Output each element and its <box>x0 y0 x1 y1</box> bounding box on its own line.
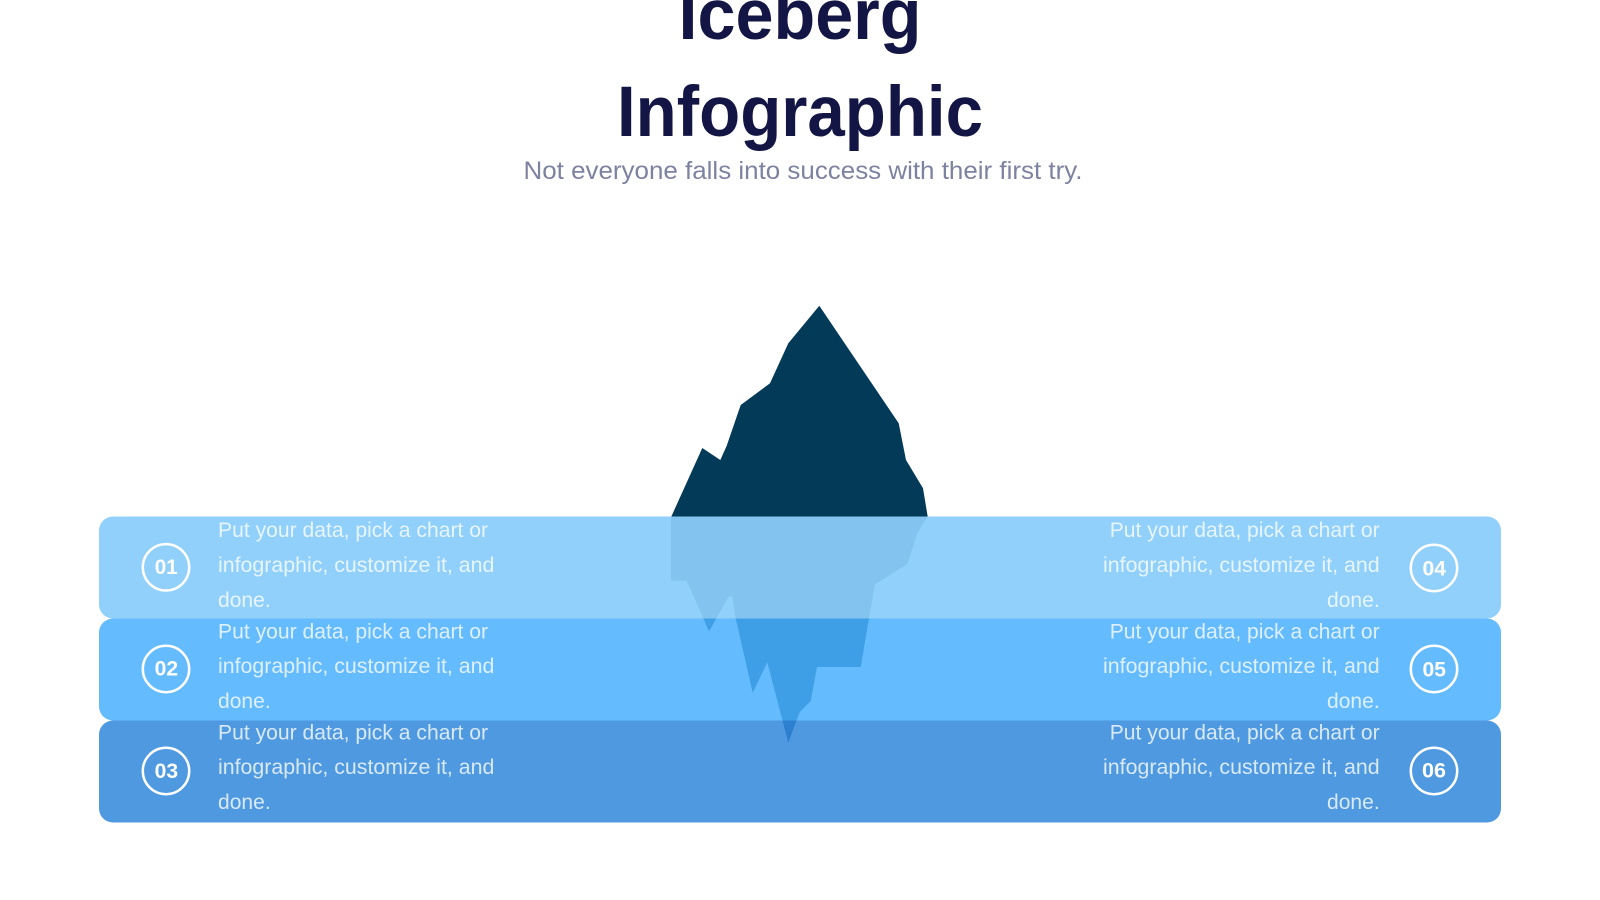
text block 06 <box>1103 721 1380 814</box>
text block 04: Put your data, pick a chart or <box>1110 519 1380 542</box>
text block 06: infographic, customize it, and <box>1103 756 1380 779</box>
subtitle: Not everyone falls into success with their first try. <box>524 157 1082 185</box>
text block 05: Put your data, pick a chart or <box>1110 620 1380 643</box>
badge 03: 03 <box>155 760 178 783</box>
text block 01 <box>218 519 494 612</box>
badge 02 <box>143 646 189 692</box>
badge 05 <box>1411 646 1457 692</box>
text block 05: done. <box>1327 690 1380 713</box>
text block 03 <box>218 721 494 814</box>
iceberg above water <box>671 306 928 517</box>
badge 04: 04 <box>1422 558 1446 580</box>
text block 04: infographic, customize it, and <box>1103 554 1380 577</box>
badge 06 <box>1411 748 1457 794</box>
text block 06: Put your data, pick a chart or <box>1110 721 1380 744</box>
badge 04 <box>1411 545 1457 591</box>
text block 02: infographic, customize it, and <box>218 655 494 678</box>
badge 06: 06 <box>1422 760 1446 782</box>
title <box>617 0 983 152</box>
text block 03: infographic, customize it, and <box>218 756 494 779</box>
text block 01: Put your data, pick a chart or <box>218 519 488 542</box>
text block 01: infographic, customize it, and <box>218 554 494 577</box>
text block 04 <box>1103 519 1380 612</box>
text block 04: done. <box>1327 589 1380 612</box>
text block 05: infographic, customize it, and <box>1103 655 1380 678</box>
text block 03: done. <box>218 791 271 814</box>
badge 01 <box>143 544 189 590</box>
text block 02 <box>218 620 494 713</box>
badge 03 <box>143 748 189 794</box>
badge 05: 05 <box>1422 658 1446 682</box>
text block 05 <box>1103 620 1380 713</box>
iceberg below water <box>671 516 928 743</box>
text block 03: Put your data, pick a chart or <box>218 721 488 744</box>
band 1 <box>99 516 1501 618</box>
band 2 <box>99 618 1501 720</box>
text block 02: Put your data, pick a chart or <box>218 620 488 643</box>
title: Infographic <box>617 73 983 152</box>
text block 02: done. <box>218 690 271 713</box>
text block 06: done. <box>1327 791 1380 814</box>
band 3 <box>99 720 1501 822</box>
badge 01: 01 <box>155 556 178 579</box>
text block 01: done. <box>218 589 271 612</box>
badge 02: 02 <box>155 658 178 680</box>
